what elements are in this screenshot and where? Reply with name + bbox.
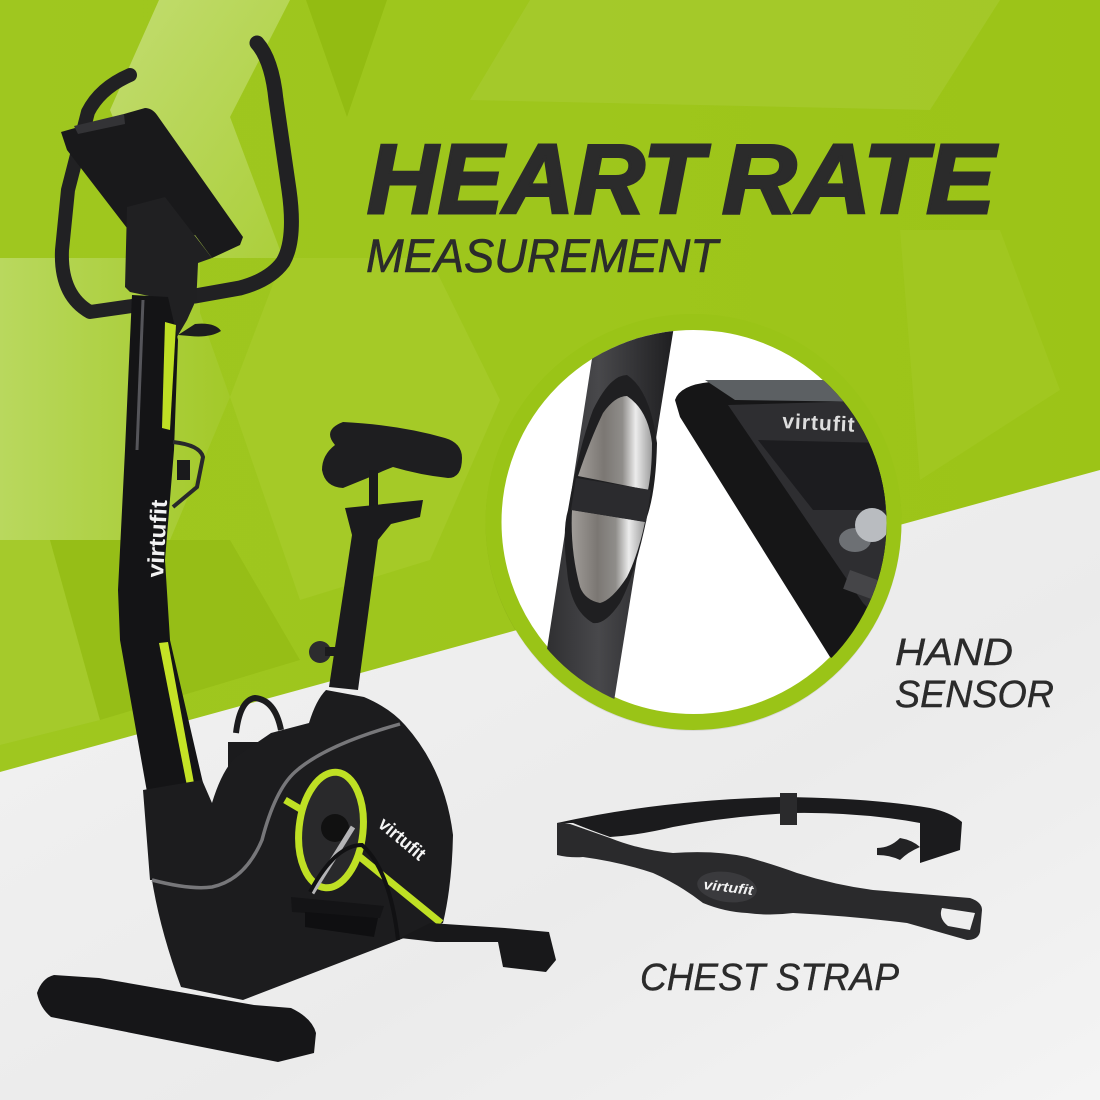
brand on housing: virtufit — [374, 814, 430, 866]
label: hand sensor: SENSOR — [895, 674, 1054, 716]
chest strap product: virtufit — [703, 876, 756, 898]
circular detail: hand sensor — [486, 315, 902, 731]
console corner: virtufit — [782, 410, 856, 437]
exercise bike — [37, 43, 556, 1062]
title: heart rate — [367, 124, 998, 234]
chest strap product — [557, 793, 982, 940]
green background — [0, 0, 1100, 800]
head tube — [125, 197, 212, 337]
pedal — [291, 897, 384, 937]
handlebars — [62, 43, 291, 312]
lime ring — [293, 769, 369, 891]
subtitle: measurement: MEASUREMENT — [366, 229, 721, 282]
bottle holder — [173, 442, 203, 507]
label: chest strap: CHEST STRAP — [640, 957, 900, 999]
pole with sensor — [547, 331, 674, 699]
elastic band — [557, 797, 962, 863]
white lower background — [0, 470, 1100, 1100]
title: heart rate: HEART — [367, 124, 710, 234]
label: hand sensor: HAND — [895, 632, 1013, 674]
main column — [118, 295, 203, 792]
lime accent lines — [285, 800, 441, 923]
front foot — [400, 923, 556, 972]
saddle — [322, 422, 462, 488]
sensor belt — [557, 823, 982, 940]
rear pedal strap — [228, 698, 281, 767]
title: heart rate: RATE — [722, 124, 998, 234]
flywheel housing — [143, 690, 453, 1000]
silver swoosh — [152, 724, 400, 888]
lime accent stripes — [162, 322, 176, 430]
rear foot — [37, 975, 316, 1062]
brand on column: virtufit — [142, 499, 172, 578]
label: hand sensor — [895, 632, 1054, 716]
buckle — [780, 793, 797, 825]
clip — [877, 838, 920, 860]
clamp lever — [178, 324, 221, 336]
console — [61, 108, 243, 258]
crank — [312, 827, 353, 893]
seat stem — [369, 470, 378, 506]
pedal strap loop — [310, 845, 398, 940]
seat post — [329, 500, 423, 690]
console corner — [675, 380, 886, 658]
